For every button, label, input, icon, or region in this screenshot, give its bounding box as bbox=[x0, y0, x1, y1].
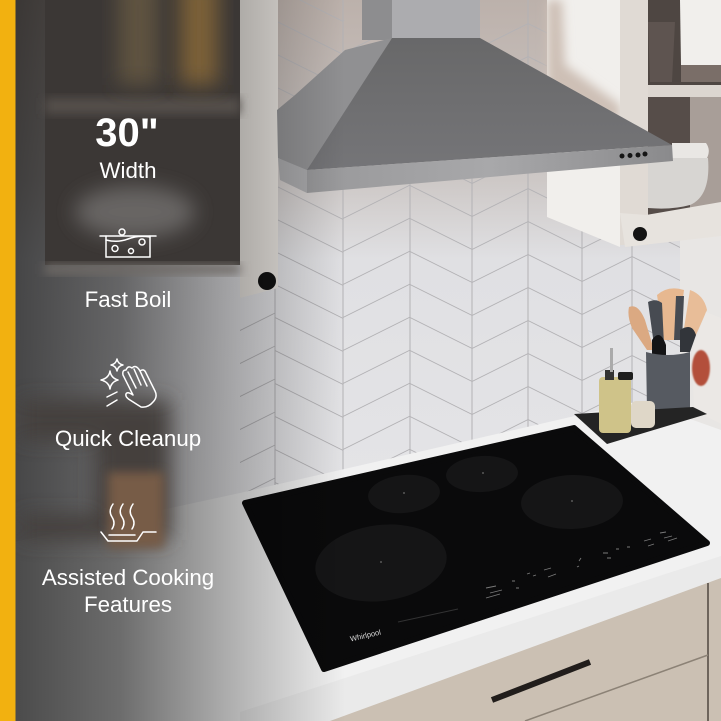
rear center burner bbox=[445, 454, 519, 494]
chimney bbox=[362, 0, 480, 40]
utensils bbox=[628, 288, 707, 356]
label width: Width bbox=[100, 158, 156, 183]
blurred left counter objects bbox=[20, 400, 170, 548]
label quick cleanup: Quick Cleanup bbox=[55, 426, 201, 451]
label features: Features bbox=[84, 592, 172, 617]
countertop front edge bbox=[240, 556, 721, 721]
left return of trim bbox=[278, 158, 307, 193]
front trim band bbox=[307, 145, 673, 193]
yellow accent bar bbox=[0, 0, 16, 721]
black tray bbox=[574, 407, 707, 444]
feature: assisted cooking bbox=[42, 504, 214, 617]
dark lid jar bbox=[618, 372, 633, 380]
reflective left side bbox=[277, 38, 392, 172]
feature: fast boil bbox=[85, 229, 171, 312]
label assisted cooking: Assisted Cooking bbox=[42, 565, 214, 590]
label fast boil: Fast Boil bbox=[85, 287, 171, 312]
utensil crock bbox=[646, 352, 690, 421]
icon: steaming pan bbox=[101, 504, 156, 541]
range hood bbox=[277, 0, 673, 193]
feature: quick cleanup bbox=[55, 359, 201, 451]
book with floral cover bbox=[692, 312, 721, 424]
drawer handle bbox=[492, 662, 590, 700]
icon: boiling pot bbox=[100, 229, 156, 257]
blurred left cabinet with objects bbox=[45, 0, 240, 274]
hood control knobs bbox=[620, 152, 648, 158]
hood sloped face bbox=[307, 38, 672, 170]
right upper cabinet bbox=[547, 0, 721, 247]
icon: clean hand with sparkles bbox=[101, 359, 156, 407]
large burner bbox=[311, 517, 451, 609]
right burner bbox=[520, 473, 624, 531]
chevron tile backsplash bbox=[240, 0, 680, 507]
base cabinets bbox=[330, 578, 721, 721]
dark gradient overlay on left bbox=[15, 0, 345, 721]
cooktop glass surface bbox=[245, 428, 707, 669]
feature: 30 inch width bbox=[95, 111, 159, 183]
heading 30 inch: 30" bbox=[95, 111, 159, 155]
induction cooktop bbox=[245, 428, 707, 669]
burner center marks and control panel markings bbox=[380, 473, 677, 622]
small jar bbox=[631, 401, 655, 428]
cabinet knob bbox=[633, 227, 647, 241]
rear left burner bbox=[366, 472, 442, 516]
left upper cabinet frame bbox=[240, 0, 278, 298]
oil bottle bbox=[599, 348, 631, 433]
white bowls bbox=[648, 143, 709, 209]
right side wall bbox=[680, 235, 721, 440]
white pitcher bbox=[680, 0, 721, 82]
cups stacked on shelf bbox=[648, 22, 675, 82]
countertop bbox=[0, 401, 721, 721]
Whirlpool logo: Whirlpool bbox=[349, 628, 382, 643]
countertop accessories bbox=[574, 288, 721, 444]
